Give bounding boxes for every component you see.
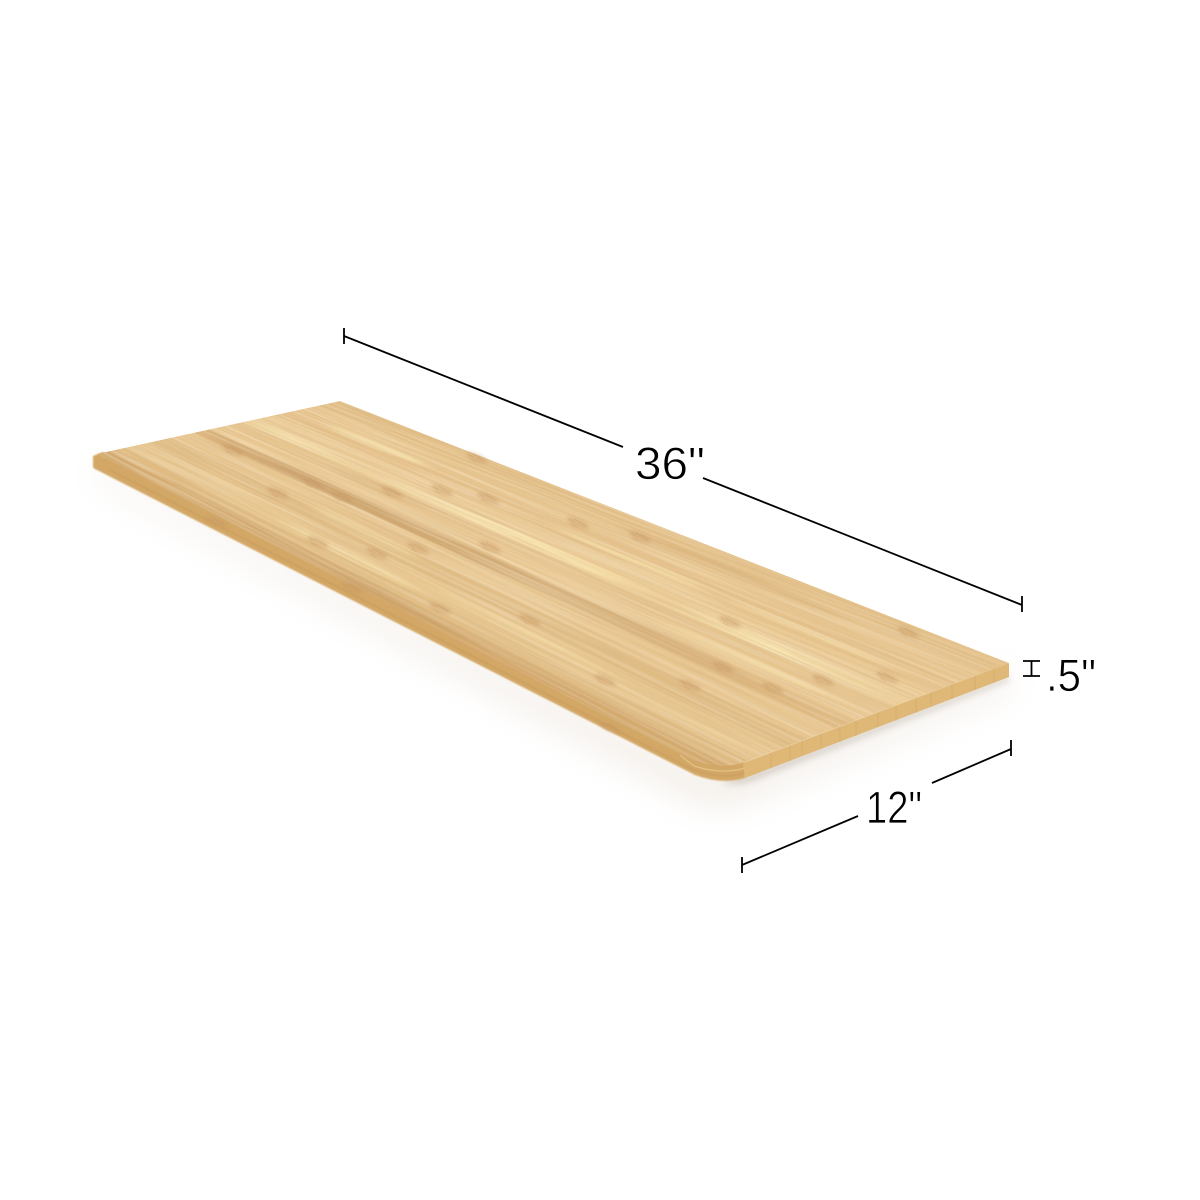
dimension: 12 inch width bbox=[742, 740, 1011, 873]
front end edge bbox=[743, 663, 1009, 778]
bamboo top surface bbox=[98, 401, 1008, 766]
dimension: 0.5 inch thickness bbox=[1023, 650, 1096, 701]
dimension: 36 inch length: 36" bbox=[635, 438, 705, 489]
dimension: 12 inch width: 12" bbox=[866, 782, 922, 833]
dimension: 36 inch length bbox=[344, 328, 1022, 612]
long side edge bbox=[93, 452, 745, 781]
dimension: 0.5 inch thickness: .5" bbox=[1046, 650, 1096, 701]
